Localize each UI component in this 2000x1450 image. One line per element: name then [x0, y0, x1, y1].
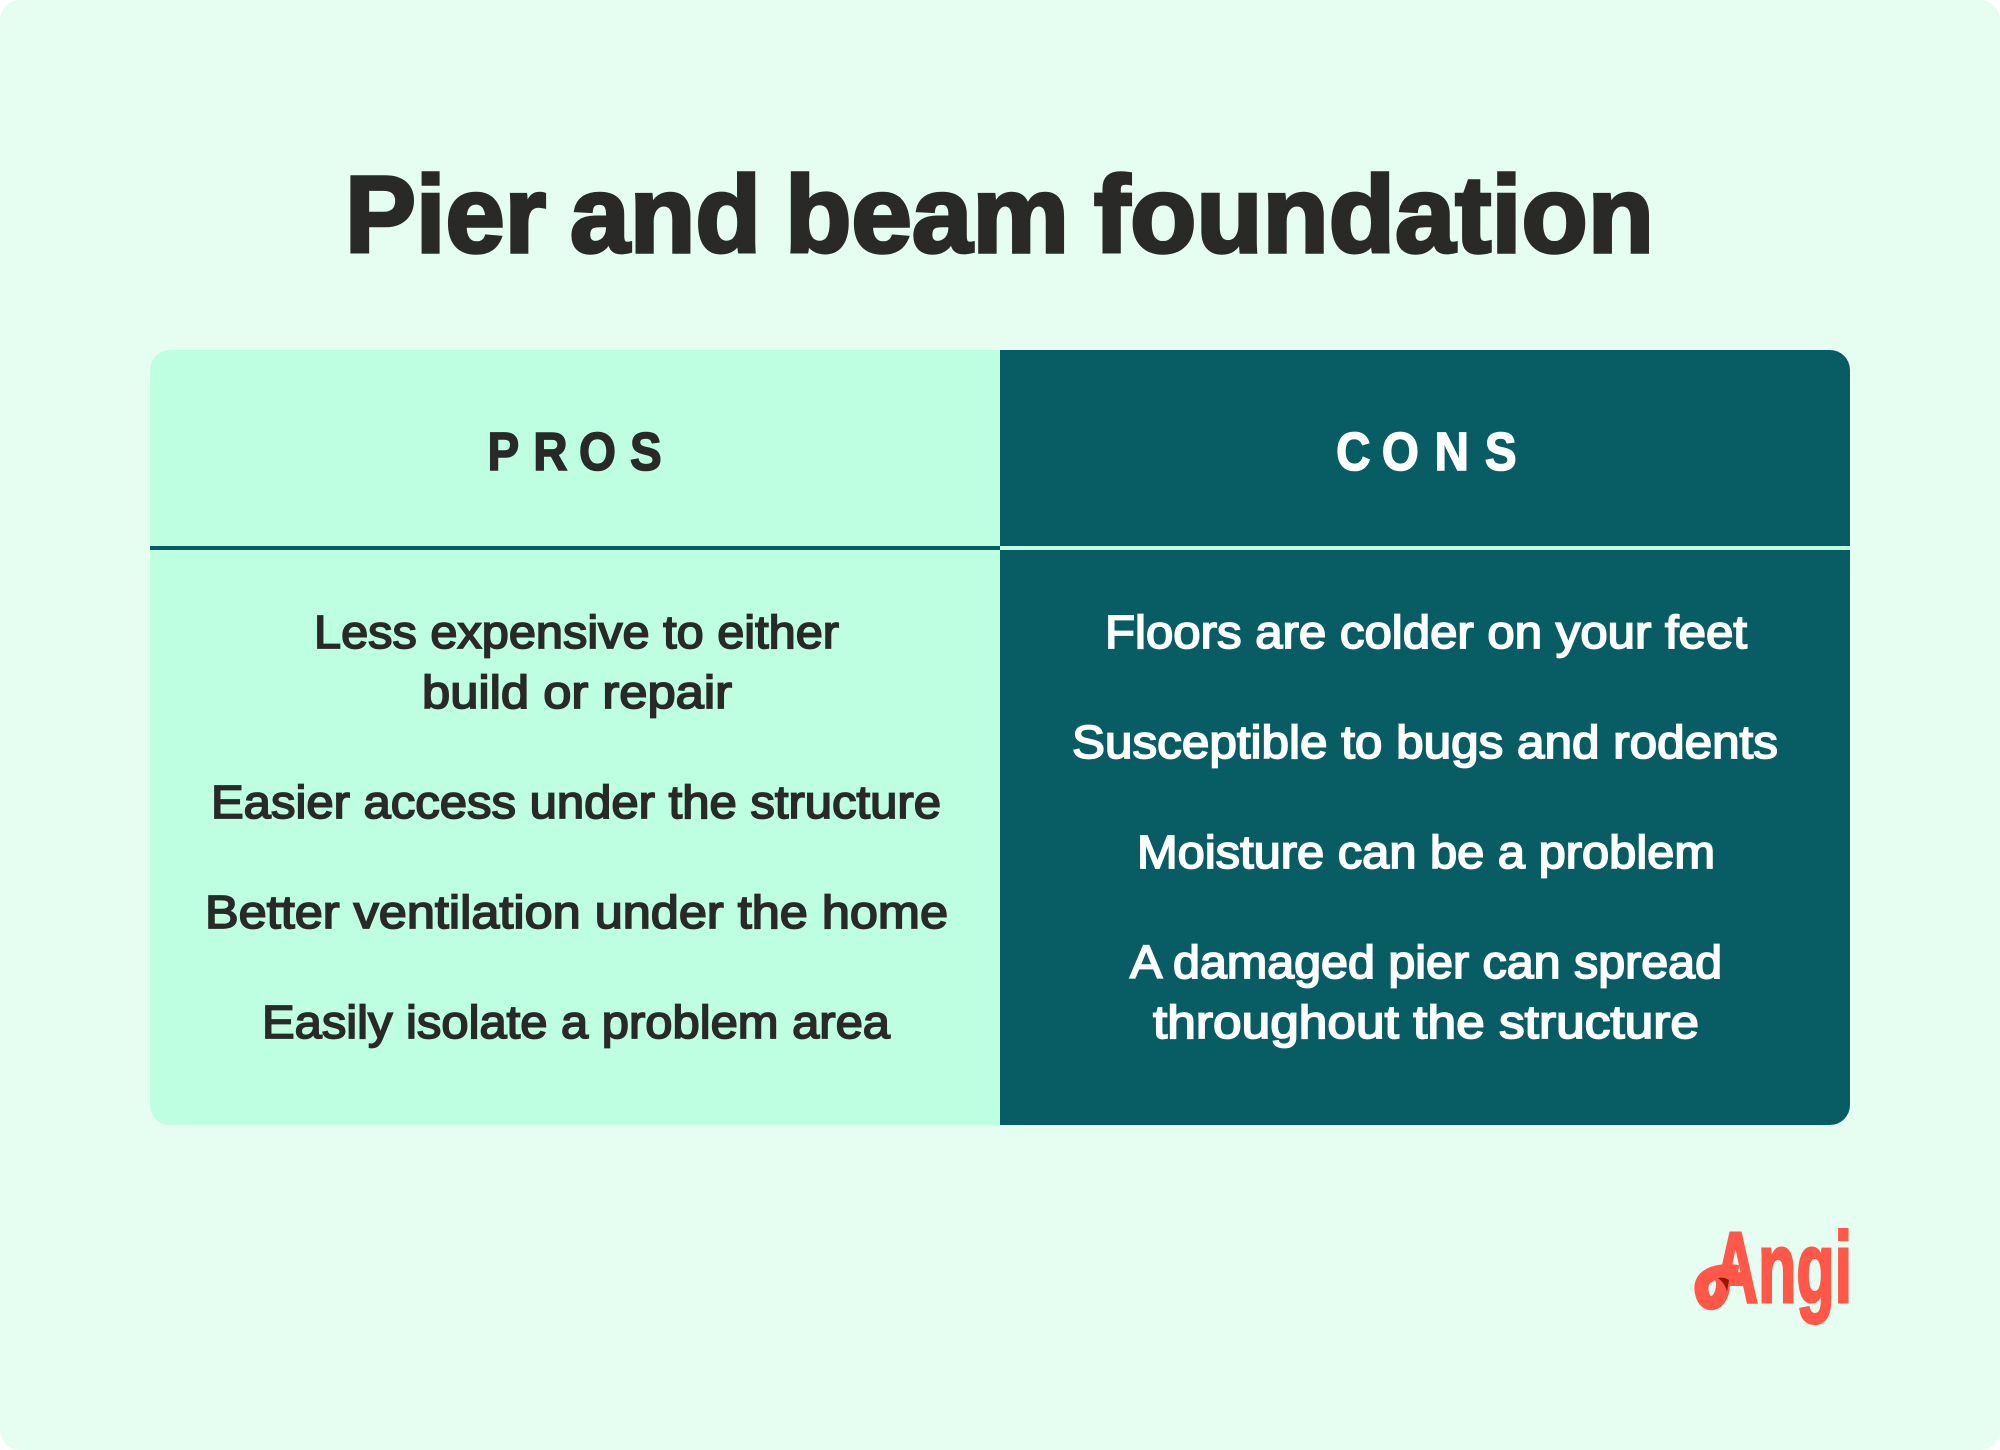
panel: pros — [150, 350, 1000, 1125]
list: cons: Susceptible to bugs and rodents — [1072, 716, 1778, 768]
title: beam — [785, 154, 1069, 276]
list: pros: build or repair — [422, 666, 732, 718]
list: pros: Easier access under the structure — [211, 776, 941, 828]
list: pros — [205, 606, 948, 1048]
logo: Angi: Angi — [1713, 1212, 1852, 1324]
list: cons: throughout the structure — [1153, 996, 1699, 1048]
heading: cons: CONS — [1336, 421, 1517, 482]
panel: cons — [1000, 350, 1850, 1125]
divider: pros — [150, 546, 1000, 550]
logo: Angi — [1701, 1212, 1852, 1324]
title — [345, 154, 1654, 276]
list: pros: Less expensive to either — [314, 606, 839, 658]
title: and — [570, 154, 761, 276]
list: cons — [1072, 606, 1778, 1048]
heading: pros: PROS — [487, 421, 662, 482]
divider: cons — [1000, 546, 1850, 550]
list: cons: Moisture can be a problem — [1137, 826, 1715, 878]
list: pros: Better ventilation under the home — [205, 886, 948, 938]
list: pros: Easily isolate a problem area — [262, 996, 890, 1048]
list: cons: A damaged pier can spread — [1130, 936, 1722, 988]
title: foundation — [1094, 154, 1654, 276]
title: Pier — [345, 154, 546, 276]
list: cons: Floors are colder on your feet — [1105, 606, 1747, 658]
